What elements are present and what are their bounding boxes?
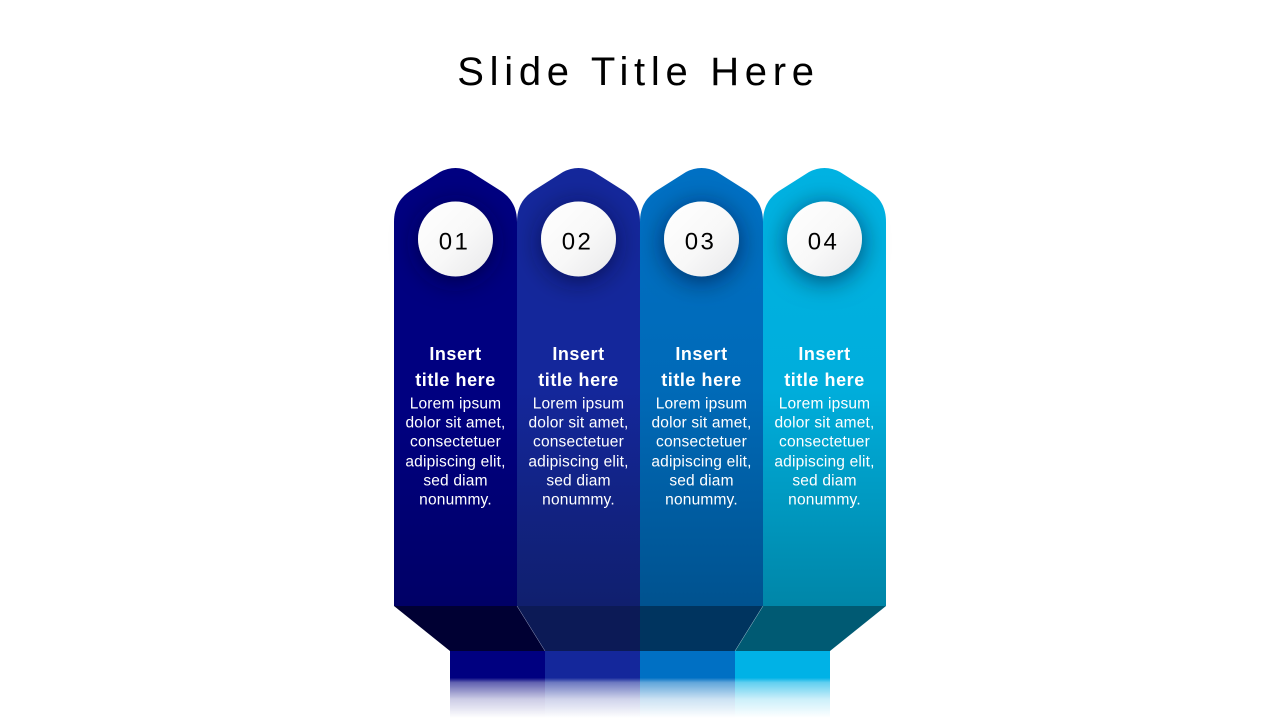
column 02 body [517,168,640,606]
panel: column 03 [640,168,763,606]
column 01 body text: consectetuer [410,434,501,450]
column 04 body text: consectetuer [779,434,870,450]
column 02 body text: Lorem ipsum [533,396,624,412]
column 01 heading: title here [415,370,496,390]
column 02 body text: consectetuer [533,434,624,450]
column 04 body text: Lorem ipsum [779,396,870,412]
column 02 body text: adipiscing elit, [528,454,629,470]
column 04 heading: Insert [798,344,851,364]
column 03 heading: Insert [675,344,728,364]
column 01 body [394,168,517,606]
column 04 body text: sed diam [792,472,857,490]
column 01 body text: adipiscing elit, [405,454,506,470]
column 03 body [640,168,763,606]
column 03 body text: nonummy. [665,492,738,508]
panel: column 02 [517,168,640,606]
column 01 body text: dolor sit amet, [405,414,506,432]
column 01 body text: Lorem ipsum [410,396,501,412]
panel: column 01 [394,168,517,606]
column 01 badge: 01 [439,228,470,256]
column 02 body text: nonummy. [542,492,615,508]
column 03 badge [664,202,739,276]
column 01 heading: Insert [429,344,482,364]
column 02 body text: sed diam [546,472,611,490]
folded base: angled facets [394,606,886,651]
column 02 body text: dolor sit amet, [528,414,629,432]
title: Slide Title Here [457,50,820,94]
column 04 body [763,168,886,606]
column 03 body text: sed diam [669,472,734,490]
fading base bars [450,651,830,718]
column 03 body text: consectetuer [656,434,747,450]
column 04 heading: title here [784,370,865,390]
column 02 badge: 02 [562,228,593,256]
column 04 body text: adipiscing elit, [774,454,875,470]
column 04 badge [787,202,862,276]
column 03 body text: Lorem ipsum [656,396,747,412]
column 04 body text: dolor sit amet, [774,414,875,432]
column 01 body text: sed diam [423,472,488,490]
column 01 badge [418,202,493,276]
column 03 heading: title here [661,370,742,390]
column 02 heading: Insert [552,344,605,364]
column 03 badge: 03 [685,228,716,256]
column 03 body text: adipiscing elit, [651,454,752,470]
column 02 badge [541,202,616,276]
panel: column 04 [763,168,886,606]
column 04 badge: 04 [808,228,839,256]
column 01 body text: nonummy. [419,492,492,508]
column 02 heading: title here [538,370,619,390]
column 03 body text: dolor sit amet, [651,414,752,432]
column 04 body text: nonummy. [788,492,861,508]
